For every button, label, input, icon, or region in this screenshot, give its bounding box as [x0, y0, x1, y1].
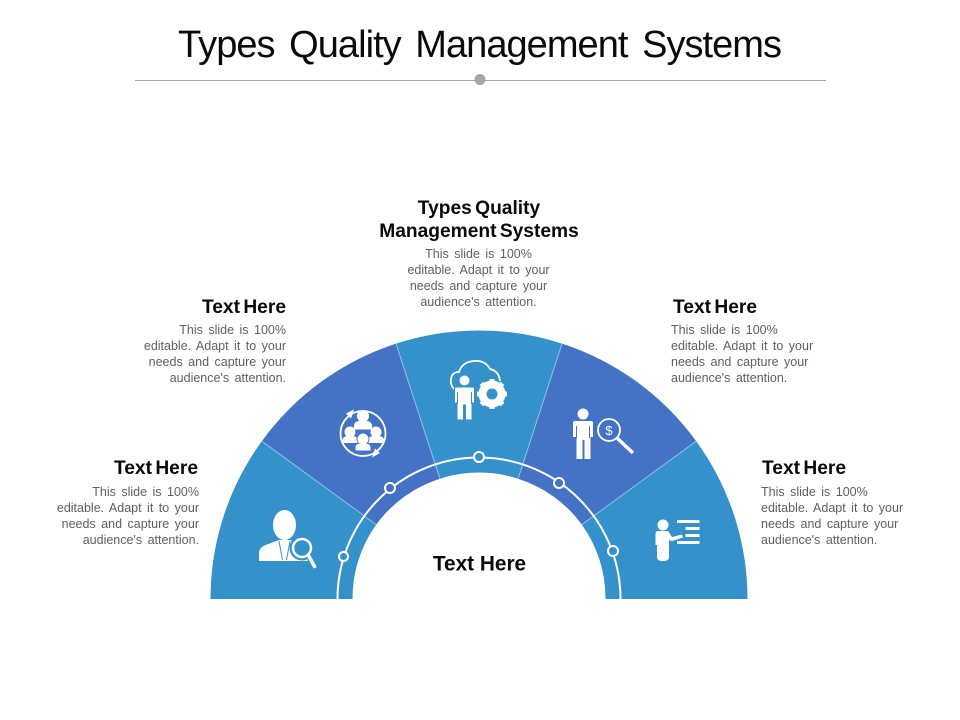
- heading: upper right: Text Here: [673, 297, 757, 318]
- semicircle diagram: [210, 330, 748, 599]
- body: top center: editable. Adapt it to your: [407, 263, 550, 277]
- body: top center: audience's attention.: [420, 295, 537, 309]
- body: upper right: audience's attention.: [671, 371, 787, 385]
- body: top center: needs and capture your: [410, 279, 547, 293]
- body: upper right: needs and capture your: [671, 355, 808, 369]
- text block: lower left: [57, 458, 199, 547]
- segment 1: far left: [210, 441, 376, 599]
- body: top center: [407, 247, 550, 309]
- body: lower right: audience's attention.: [761, 533, 877, 547]
- heading: lower right: Text Here: [762, 458, 846, 479]
- text block: upper right: [671, 297, 813, 385]
- text block: lower right: [761, 458, 903, 547]
- segment 4: right: [518, 344, 696, 525]
- segment 5: far right: [582, 441, 748, 599]
- heading: top center: Types Quality: [418, 198, 541, 219]
- segment separators: [262, 344, 696, 525]
- body: lower left: needs and capture your: [62, 517, 199, 531]
- icon: people group in circular arrows: [340, 410, 386, 458]
- text block: upper left: [144, 297, 286, 385]
- body: lower right: This slide is 100%: [761, 485, 868, 499]
- heading: upper left: Text Here: [202, 297, 286, 318]
- center label: Text Here: [433, 552, 526, 576]
- timeline nodes: [339, 452, 618, 561]
- body: lower left: editable. Adapt it to your: [57, 501, 199, 515]
- body: upper right: This slide is 100%: [671, 323, 778, 337]
- body: lower right: needs and capture your: [761, 517, 898, 531]
- body: lower right: editable. Adapt it to your: [761, 501, 903, 515]
- body: upper right: editable. Adapt it to your: [671, 339, 813, 353]
- body: upper left: This slide is 100%: [179, 323, 286, 337]
- body: lower left: audience's attention.: [83, 533, 199, 547]
- body: upper left: needs and capture your: [149, 355, 286, 369]
- body: lower right: [761, 485, 903, 547]
- text block: top center: [379, 198, 579, 309]
- segment 2: left: [262, 344, 440, 525]
- body: lower left: This slide is 100%: [92, 485, 199, 499]
- icon: person with cloud and gear: [451, 361, 507, 420]
- icon: person with dollar magnifier: [573, 408, 633, 459]
- body: upper left: editable. Adapt it to your: [144, 339, 286, 353]
- icon: businessman with magnifier: [259, 510, 314, 566]
- body: upper right: [671, 323, 813, 385]
- heading: lower left: Text Here: [114, 458, 198, 479]
- title: Types Quality Management Systems: [178, 24, 782, 66]
- segment 3: center: [396, 330, 562, 479]
- body: upper left: [144, 323, 286, 385]
- icon: person with dollar magnifier: $: [605, 423, 613, 438]
- body: upper left: audience's attention.: [170, 371, 286, 385]
- heading: top center: [379, 198, 579, 242]
- white timeline arc: [338, 458, 620, 599]
- title divider with dot: [135, 74, 826, 85]
- heading: top center: Management Systems: [379, 221, 579, 242]
- icon: presenter with list: [656, 520, 700, 561]
- body: lower left: [57, 485, 199, 547]
- body: top center: This slide is 100%: [425, 247, 532, 261]
